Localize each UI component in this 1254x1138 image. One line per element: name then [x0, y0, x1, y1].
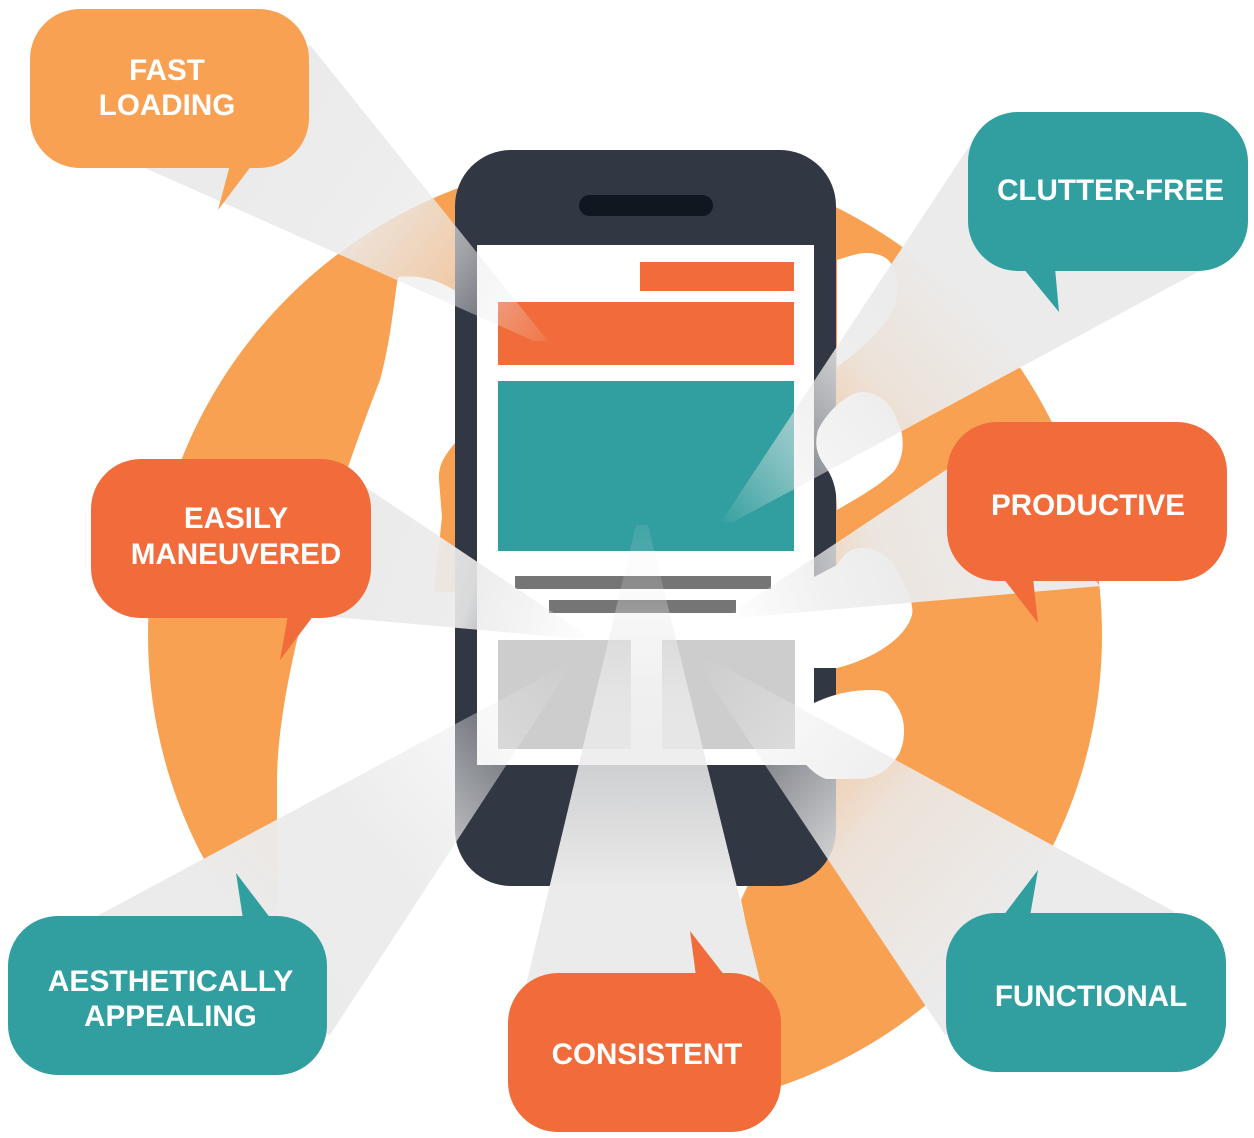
bubble: clutter-free: CLUTTER-FREE	[997, 174, 1224, 207]
ray: fast loading	[145, 45, 548, 341]
finger two	[816, 392, 903, 510]
ray: consistent	[526, 525, 761, 985]
gray text line two	[549, 600, 736, 613]
finger one	[837, 253, 898, 367]
bubble: easily maneuvered: EASILY	[184, 502, 288, 535]
bubble: functional: FUNCTIONAL	[995, 980, 1187, 1013]
orange background circle	[148, 158, 1102, 1112]
bubble: easily maneuvered: MANEUVERED	[131, 538, 341, 571]
gray text line one	[515, 576, 771, 589]
bubble: functional	[946, 870, 1226, 1072]
bubble: aesthetically appealing	[8, 873, 327, 1075]
bubble: fast loading: LOADING	[99, 89, 235, 122]
ray: easily maneuvered	[300, 470, 594, 640]
finger four	[805, 690, 904, 779]
finger three	[812, 548, 912, 668]
ray: aesthetically appealing	[95, 660, 575, 1035]
bubble: productive: PRODUCTIVE	[991, 489, 1185, 522]
gray thumbnail left	[498, 640, 631, 749]
bubble: aesthetically appealing: APPEALING	[84, 1000, 257, 1033]
phone speaker	[579, 195, 713, 216]
orange thumb beside phone	[434, 438, 460, 592]
phone screen	[477, 245, 814, 765]
bubble: productive	[947, 422, 1227, 623]
white hand silhouette, left and lower area	[270, 276, 762, 1138]
ray: functional	[695, 660, 1175, 1035]
bubble: aesthetically appealing: AESTHETICALLY	[48, 965, 293, 998]
orange banner	[498, 302, 794, 365]
phone	[455, 150, 836, 886]
rays of light	[95, 45, 1205, 1035]
bubble: fast loading: FAST	[129, 54, 205, 87]
bubble: easily maneuvered	[91, 459, 371, 660]
teal content block	[498, 381, 794, 551]
gray thumbnail right	[662, 640, 795, 749]
phone body	[455, 150, 836, 886]
bubble: consistent	[508, 931, 781, 1132]
white fingers holding phone	[805, 253, 912, 779]
ray: clutter-free	[721, 145, 1205, 522]
bubble: fast loading	[30, 9, 309, 210]
bubble: consistent: CONSISTENT	[552, 1038, 742, 1071]
small orange header bar	[640, 262, 794, 291]
ray: productive	[725, 444, 1100, 618]
bubble: clutter-free	[968, 112, 1248, 312]
